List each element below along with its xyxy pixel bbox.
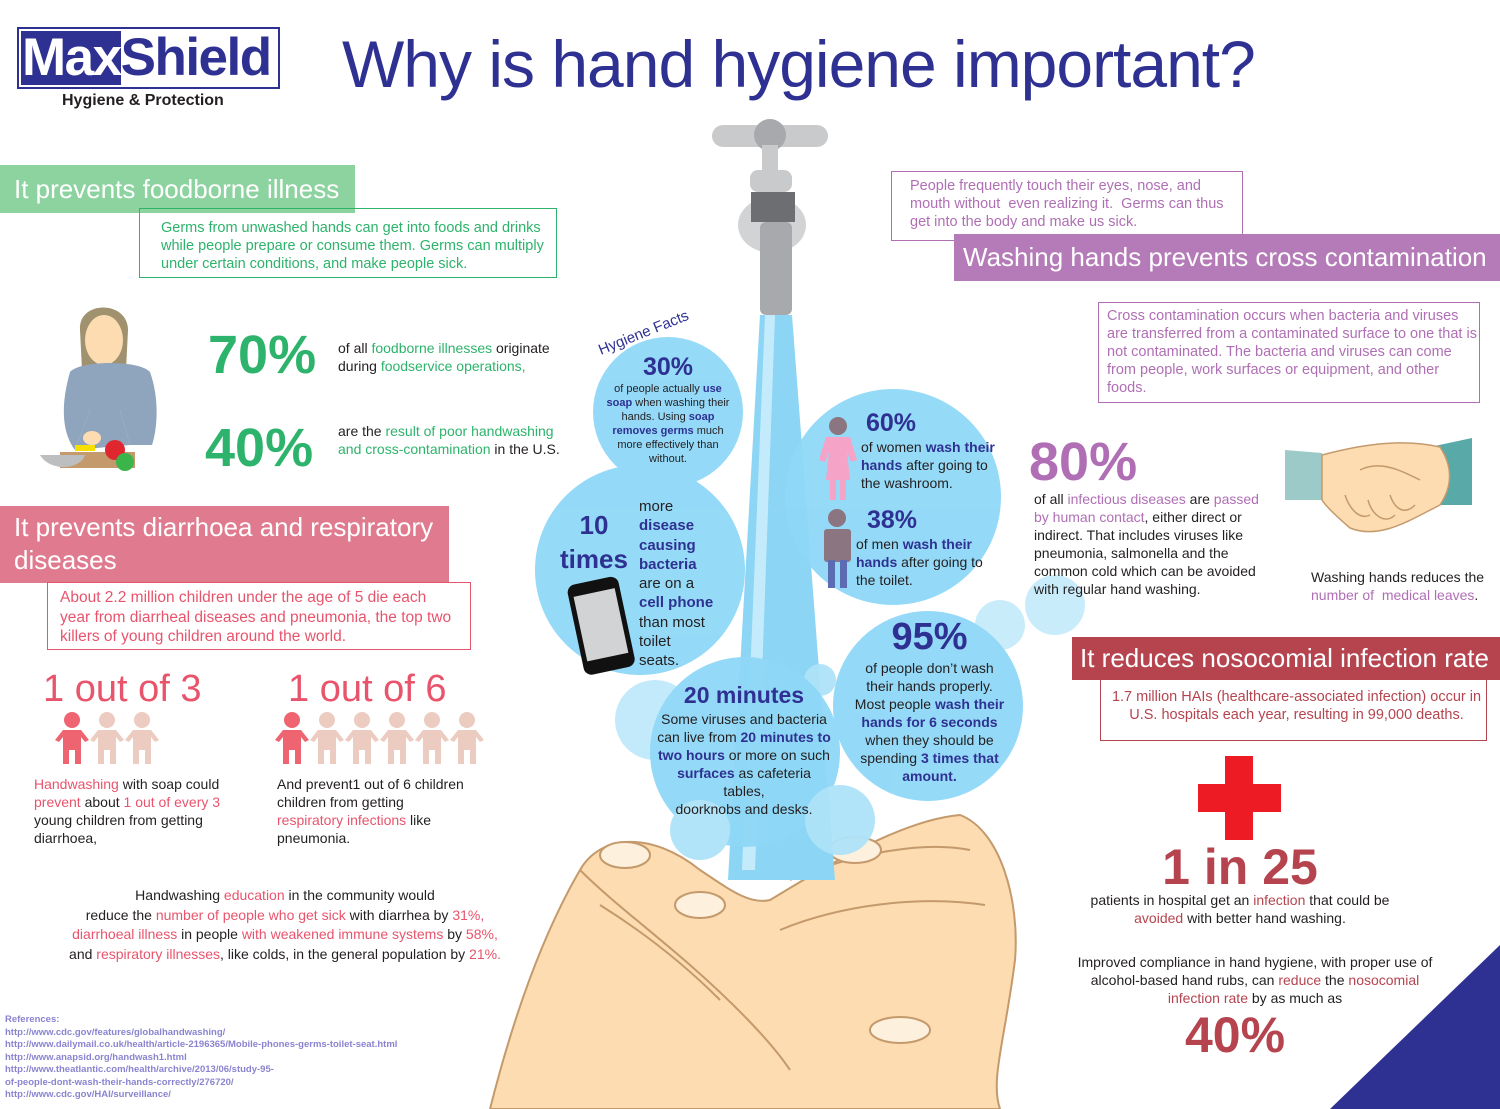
fact: 95%: of people don’t wash their hands properly. Most people wash their hands for 6 seconds when they should be spending 3 times that amount.: [855, 660, 1004, 784]
text box: People frequently touch their eyes, nose, and mouth without even realizing it. Germs can thus get into the body and make us sick.: [910, 178, 1224, 230]
bottom paragraph: reduce the number of people who get sick with diarrhea by 31%,: [86, 906, 484, 922]
text: causing: [639, 537, 696, 554]
icon: handshake: [1285, 438, 1472, 532]
text box 2: Cross contamination occurs when bacteria and viruses are transferred from a contaminated surface to one that is not contaminated. The bacteria and viruses can come from people, work surfaces or equipment, and other foods.: [1107, 308, 1477, 396]
references: http://www.anapsid.org/handwash1.html: [5, 1052, 187, 1062]
fact: 95%: 95%: [891, 616, 968, 658]
text: cell phone: [639, 594, 713, 611]
heading: It prevents diarrhoea and respiratory diseases: [14, 512, 433, 575]
heading: [954, 234, 1500, 281]
hygiene facts label: Hygiene Facts: [596, 307, 691, 359]
icon: woman figure: [819, 417, 857, 500]
text box: [1100, 679, 1487, 741]
fact: 60% women: 60%: [866, 409, 916, 437]
bottom paragraph: Handwashing education in the community would: [135, 887, 435, 903]
bottom paragraph: [69, 887, 501, 962]
panel: cross contamination: [891, 171, 1500, 603]
text box: About 2.2 million children under the age of 5 die each year from diarrheal diseases and pneumonia, the top two killers of young children around the world.: [60, 589, 451, 645]
icon: children 3: [55, 712, 159, 764]
references: http://www.cdc.gov/HAI/surveillance/: [5, 1089, 171, 1100]
fact: 30%: 30%: [643, 353, 693, 381]
references: of-people-dont-wash-their-hands-correctly/276720/: [5, 1076, 234, 1088]
panel: diarrhoea: [0, 506, 501, 962]
stat 1 of 6: 1 out of 6: [288, 668, 446, 710]
references: [5, 1014, 397, 1100]
panel: nosocomial: 40%: [1185, 1007, 1285, 1063]
fact: 38% men: 38%: [867, 506, 917, 534]
fact: 38% men: of men wash their hands after going to the toilet.: [856, 536, 983, 588]
text: more: [639, 498, 673, 515]
icon: hands: [490, 815, 1016, 1109]
fact: 10 times: times: [560, 544, 628, 574]
icon: children 6: [275, 712, 484, 764]
fact: 20 minutes: Some viruses and bacteria can live from 20 minutes to two hours or more on such surfaces as cafeteria tables,: [657, 711, 831, 799]
fact: 60% women: of women wash their hands after going to the washroom.: [861, 439, 995, 491]
stat 40: Improved compliance in hand hygiene, with proper use of alcohol-based hand rubs, can reduce the nosocomial infection rate by as much as: [1078, 954, 1432, 1006]
text box: 1.7 million HAIs (healthcare-associated infection) occur in U.S. hospitals each year, resulting in 99,000 deaths.: [1112, 689, 1481, 723]
text box: Germs from unwashed hands can get into foods and drinks while people prepare or consume them. Germs can multiply under certain conditions, and make people sick.: [161, 220, 544, 272]
icon: water stream: [728, 315, 835, 880]
fact: 38% men: [856, 506, 983, 588]
icon: woman: [64, 308, 157, 450]
stat 40: 40%: [205, 418, 313, 478]
heading: [1072, 637, 1500, 680]
heading: It prevents foodborne illness: [14, 174, 339, 204]
heading: It reduces nosocomial infection rate: [1080, 643, 1489, 673]
caption: Washing hands reduces the number of medical leaves.: [1311, 569, 1484, 603]
panel: diarrhoea: Handwashing with soap could prevent about 1 out of every 3 young children from getting diarrhoea,: [34, 776, 220, 846]
fact: 60% women: [861, 409, 995, 491]
heading: [0, 165, 355, 213]
fact: 20 minutes: doorknobs and desks.: [676, 801, 812, 817]
fact: 20 minutes: [657, 682, 831, 817]
text box: [891, 171, 1243, 241]
text: bacteria: [639, 556, 697, 573]
icon: phone: [566, 575, 636, 676]
panel: foodborne: are the result of poor handwashing and cross-contamination in the U.S.: [338, 423, 560, 457]
heading: Washing hands prevents cross contamination: [963, 242, 1487, 272]
fact: 10 times: 10: [580, 510, 608, 540]
references: References:: [5, 1014, 59, 1025]
text: than most: [639, 614, 705, 631]
references: http://www.dailymail.co.uk/health/article-2196365/Mobile-phones-germs-toilet-seat.html: [5, 1039, 397, 1050]
references: http://www.cdc.gov/features/globalhandwashing/: [5, 1026, 225, 1038]
stat 80: 80%: [1029, 432, 1137, 492]
icon: faucet: [712, 119, 828, 315]
text: seats.: [639, 652, 679, 669]
stat 1 of 3: 1 out of 3: [43, 668, 201, 710]
text: are on a: [639, 575, 694, 592]
fact: 30%: of people actually use soap when washing their hands. Using soap removes germs much more effectively than without.: [607, 383, 729, 465]
bottom paragraph: diarrhoeal illness in people with weakened immune systems by 58%,: [72, 926, 498, 942]
panel: diarrhoea: And prevent1 out of 6 children children from getting respiratory infections like pneumonia.: [277, 776, 464, 846]
text: toilet: [639, 633, 671, 650]
panel: nosocomial: patients in hospital get an infection that could be avoided with better hand washing.: [1091, 892, 1389, 926]
fact: 20 minutes: 20 minutes: [684, 682, 804, 708]
bubbles: [535, 337, 1085, 860]
panel: cross contamination: of all infectious diseases are passed by human contact, either direct or indirect. That includes viruses like pneumonia, salmonella and the common cold which can be avoided with regular hand washing.: [1034, 491, 1259, 597]
text box: [139, 208, 557, 278]
icon: man figure: [824, 509, 851, 588]
fact: 10 times: [560, 510, 628, 574]
stat 70: 70%: [208, 325, 316, 385]
icon: cutting board: [40, 431, 135, 471]
panel: nosocomial: [1072, 637, 1500, 1063]
text: disease: [639, 517, 694, 534]
references: http://www.theatlantic.com/health/archive/2013/06/study-95-: [5, 1064, 274, 1075]
logo: MaxShield: [22, 28, 271, 87]
title: Why is hand hygiene important?: [342, 27, 1255, 101]
panel: foodborne: of all foodborne illnesses originate during foodservice operations,: [338, 340, 550, 374]
stat 1 in 25: 1 in 25: [1162, 839, 1318, 895]
panel: foodborne: [0, 165, 560, 478]
bottom paragraph: and respiratory illnesses, like colds, in the general population by 21%.: [69, 946, 501, 962]
icon: red cross: [1198, 756, 1281, 840]
logo subtitle: Hygiene & Protection: [62, 92, 224, 109]
icon: blue corner triangle: [1330, 945, 1500, 1109]
